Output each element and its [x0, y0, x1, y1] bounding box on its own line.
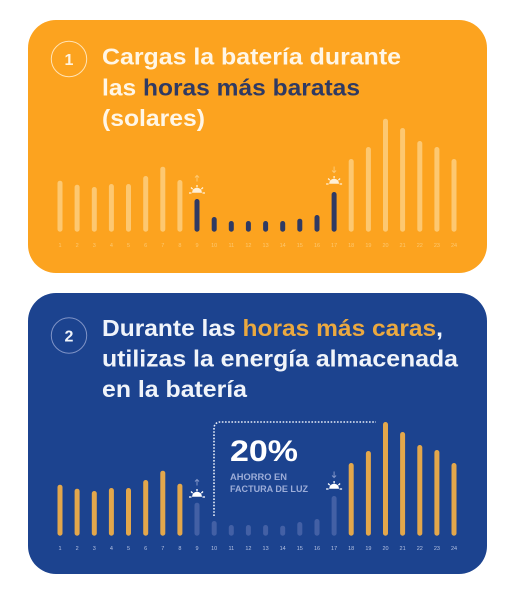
hour labels: 6 [144, 243, 147, 249]
heading: step 2: en la batería [102, 376, 248, 402]
heading: step 1: las horas más baratas [102, 74, 360, 100]
hour labels: 17 [331, 546, 337, 552]
hour labels: 1 [58, 546, 62, 552]
hour labels: 18 [348, 546, 354, 552]
hour labels: 18 [348, 243, 354, 249]
hour labels: 5 [127, 243, 130, 249]
hour labels: 10 [211, 546, 217, 552]
hour labels: 15 [297, 243, 303, 249]
hour labels: 23 [434, 546, 440, 552]
faded solar hours [194, 496, 337, 536]
hour labels: 6 [144, 546, 147, 552]
hour labels: 3 [93, 243, 96, 249]
bar chart: hourly price, cheap solar hours highlighted [58, 119, 457, 249]
hour labels: 21 [400, 546, 406, 552]
hour labels: 19 [365, 243, 371, 249]
hour labels: 9 [195, 243, 199, 249]
step number 1 [51, 41, 87, 77]
hour labels [58, 546, 457, 552]
hour labels: 8 [178, 243, 181, 249]
heading: step 2: utilizas la energía almacenada [102, 346, 459, 372]
expensive hours after solar window [349, 422, 456, 536]
icon: sunrise [189, 176, 205, 193]
hour labels: 12 [245, 243, 251, 249]
icon: sunset [326, 166, 342, 184]
hour labels: 14 [280, 243, 286, 249]
expensive hours before solar window [58, 471, 182, 536]
hour labels: 24 [451, 243, 457, 249]
hour labels: 17 [331, 243, 337, 249]
hour labels: 2 [76, 546, 79, 552]
hour labels: 19 [365, 546, 371, 552]
callout: 20% savings [230, 435, 309, 494]
step number 2: 2 [65, 328, 74, 346]
hour labels [58, 243, 457, 249]
hour labels: 7 [161, 546, 164, 552]
hour labels: 13 [263, 243, 269, 249]
dotted bracket: savings window [214, 422, 376, 516]
hour labels: 16 [314, 243, 320, 249]
hour labels: 16 [314, 546, 320, 552]
hour labels: 24 [451, 546, 457, 552]
hour labels: 1 [58, 243, 62, 249]
icon: sunrise [189, 480, 205, 497]
hour labels: 11 [228, 243, 234, 249]
hour labels: 7 [161, 243, 164, 249]
hour labels: 13 [263, 546, 269, 552]
callout: 20% savings: FACTURA DE LUZ [230, 484, 309, 494]
hour labels: 4 [110, 243, 113, 249]
hour labels: 21 [400, 243, 406, 249]
hour labels: 14 [280, 546, 286, 552]
hour labels: 4 [110, 546, 113, 552]
panel: step 1 [28, 20, 487, 273]
hour labels: 22 [417, 243, 423, 249]
hour labels: 20 [382, 546, 389, 552]
heading: step 1: (solares) [102, 105, 205, 131]
panel: step 2 [28, 293, 487, 574]
hour labels: 8 [178, 546, 181, 552]
step number 1: 1 [65, 52, 74, 69]
hour labels: 9 [195, 546, 199, 552]
heading: step 2: Durante las horas más caras , [102, 315, 443, 341]
icon: sunset [326, 472, 342, 489]
expensive hours before solar window [58, 167, 182, 232]
hour labels: 3 [93, 546, 96, 552]
hour labels: 10 [211, 243, 217, 249]
expensive hours after solar window [349, 119, 456, 232]
callout: 20% savings: AHORRO EN [230, 472, 287, 482]
bar chart: hourly price, battery used at expensive hours [58, 422, 457, 552]
hour labels: 22 [417, 546, 423, 552]
heading: step 2 [102, 315, 459, 402]
hour labels: 20 [382, 243, 389, 249]
hour labels: 5 [127, 546, 130, 552]
hour labels: 12 [245, 546, 251, 552]
hour labels: 11 [228, 546, 234, 552]
callout: 20% savings: 20% [230, 435, 298, 468]
heading: step 1 [102, 44, 401, 131]
hour labels: 2 [76, 243, 79, 249]
step number 2 [51, 318, 87, 353]
hour labels: 23 [434, 243, 440, 249]
cheap solar hours [194, 192, 337, 232]
heading: step 1: Cargas la batería durante [102, 44, 401, 70]
hour labels: 15 [297, 546, 303, 552]
